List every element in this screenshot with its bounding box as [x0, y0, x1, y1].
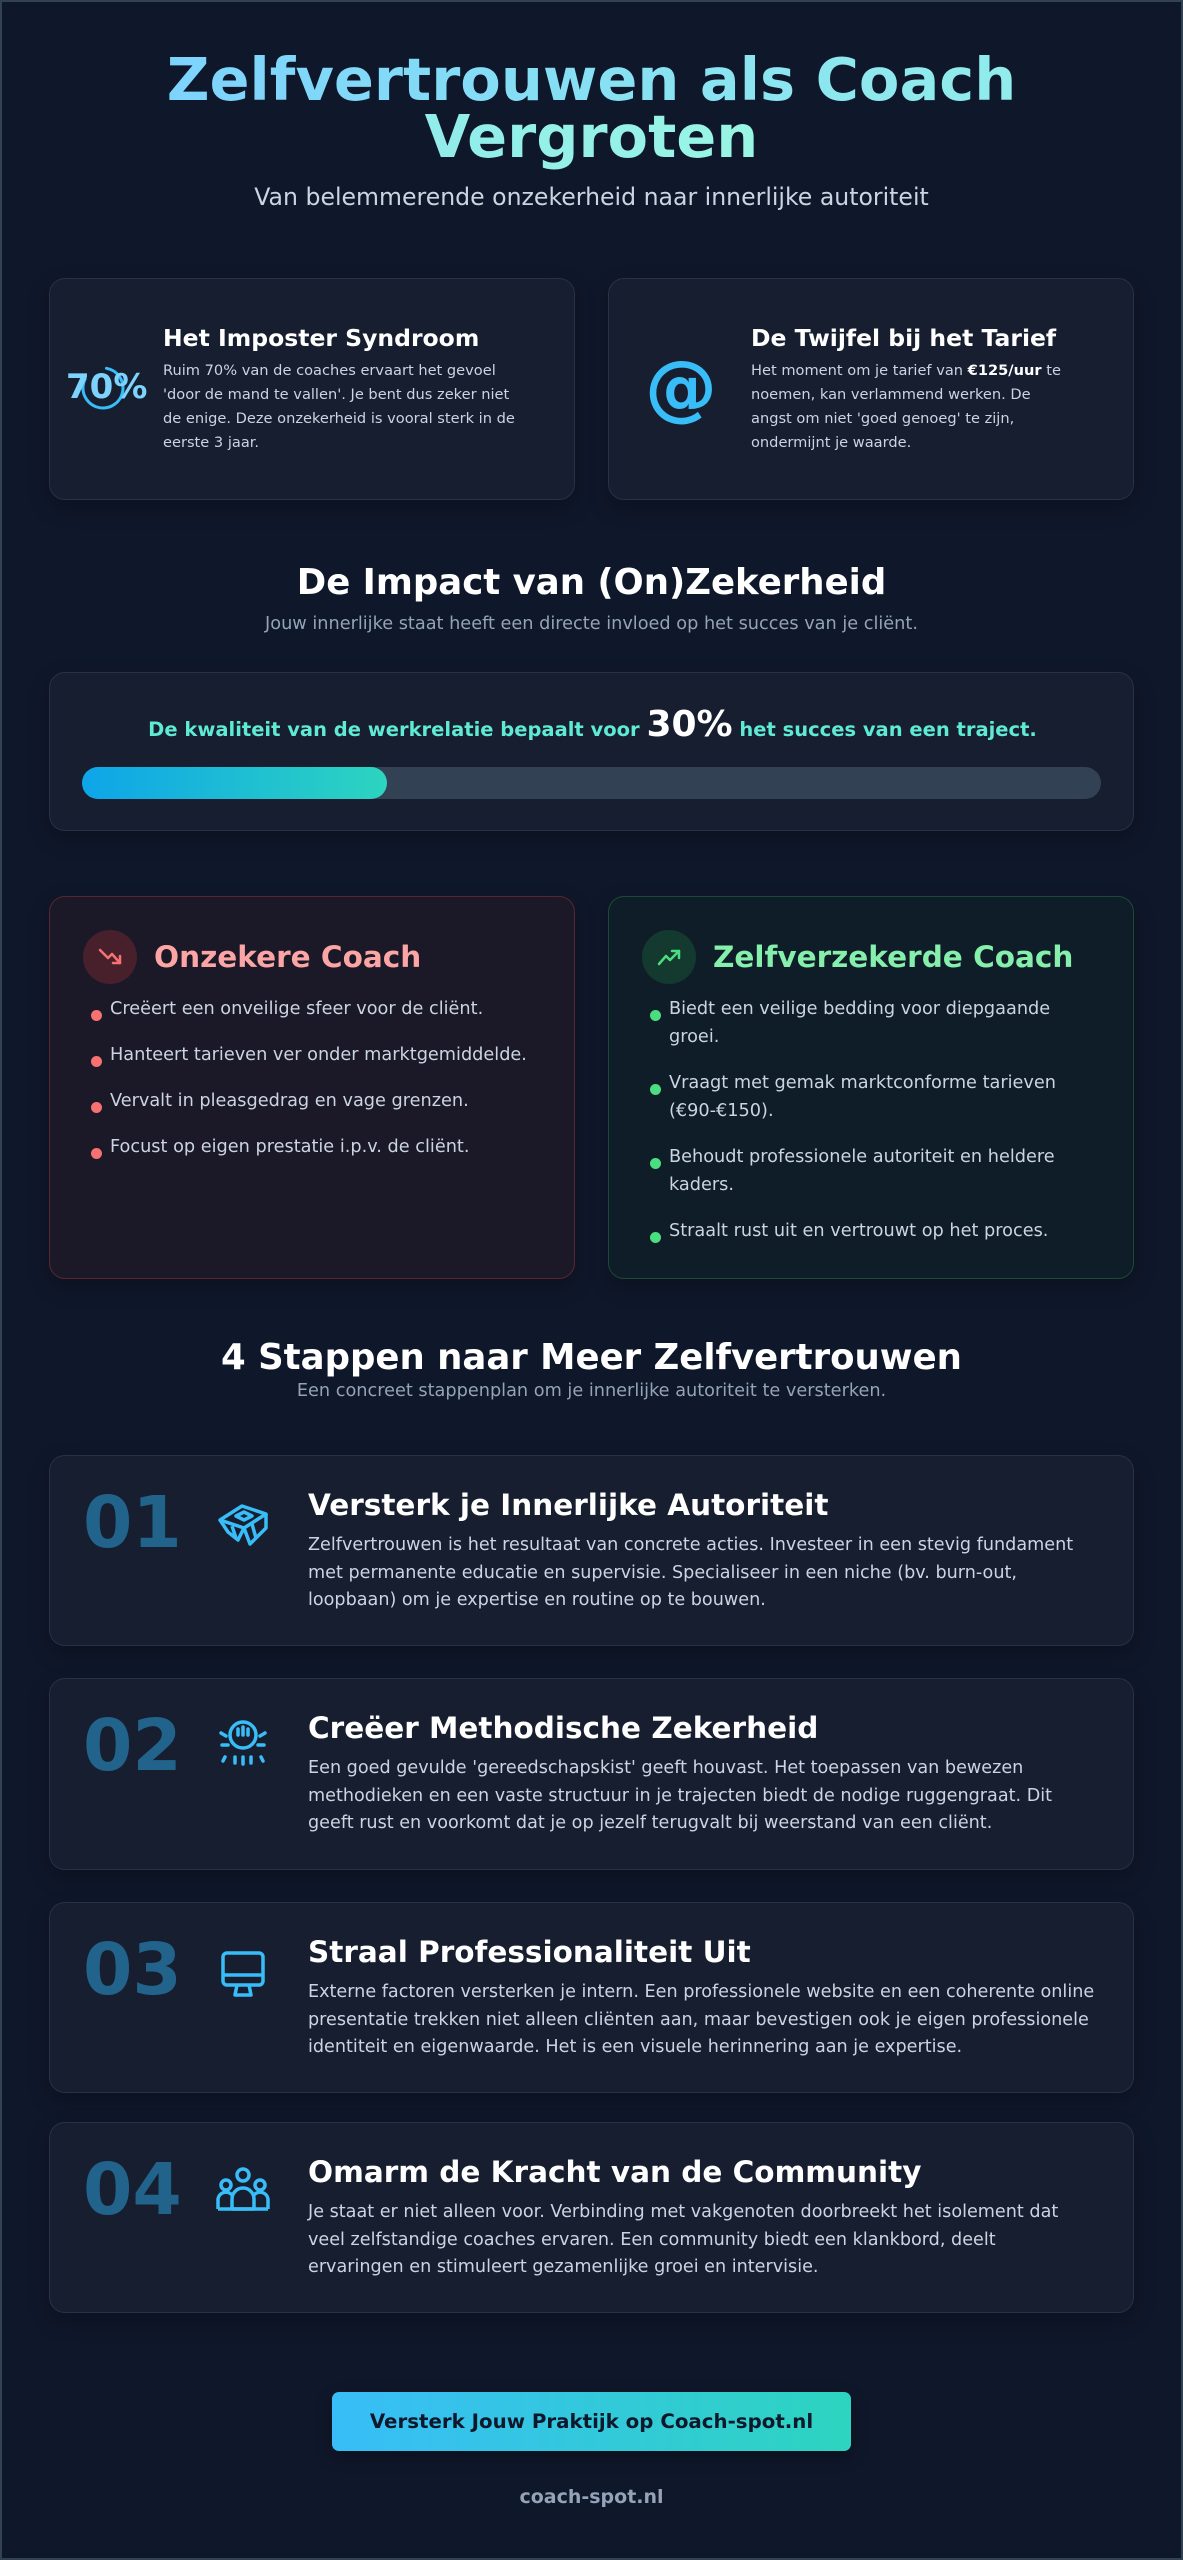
text: angst om niet 'goed genoeg' te zijn,	[751, 410, 1014, 427]
panel: stat 30%	[49, 672, 1134, 831]
panel: twijfel tarief	[608, 278, 1134, 500]
subtitle: impact: Jouw innerlijke staat heeft een directe invloed op het succes van je cliënt.	[265, 614, 918, 634]
cta button	[332, 2392, 851, 2451]
text: identiteit en eigenwaarde. Het is een visuele herinnering aan je expertise.	[308, 2037, 962, 2057]
title: Zelfvertrouwen als Coach	[167, 45, 1016, 114]
text: de enige. Deze onzekerheid is vooral sterk in de	[163, 410, 515, 427]
heading: Creëer Methodische Zekerheid	[308, 1711, 818, 1745]
title	[167, 45, 1016, 171]
number: 02	[83, 1704, 182, 1787]
text	[751, 362, 1061, 451]
list: Focust op eigen prestatie i.p.v. de cliënt.	[110, 1137, 469, 1157]
panel: step 03	[49, 1902, 1134, 2093]
text	[308, 1758, 1052, 1833]
icon: at sign: @	[645, 345, 717, 429]
heading: impact: De Impact van (On)Zekerheid	[297, 562, 886, 603]
list: Vraagt met gemak marktconforme tarieven (€90-€150).	[669, 1073, 1056, 1121]
heading: Straal Professionaliteit Uit	[308, 1935, 751, 1969]
list	[650, 999, 1056, 1243]
icon: cube	[218, 1504, 268, 1546]
icon: 70%: 70%	[66, 367, 147, 407]
text: methodieken en een vaste structuur in je trajecten biedt de nodige ruggengraat. Dit	[308, 1786, 1052, 1806]
number: 03	[83, 1928, 182, 2011]
subtitle: Van belemmerende onzekerheid naar innerlijke autoriteit	[254, 183, 929, 211]
icon: trend down	[83, 930, 137, 984]
text: geeft rust en voorkomt dat je op jezelf terugvalt bij weerstand van een cliënt.	[308, 1813, 992, 1833]
text	[307, 2202, 1058, 2277]
text: Ruim 70% van de coaches ervaart het gevoel	[163, 362, 496, 379]
list: Vervalt in pleasgedrag en vage grenzen.	[110, 1091, 469, 1111]
text: noemen, kan verlammend werken. De	[751, 386, 1031, 403]
list: Behoudt professionele autoriteit en heldere kaders.	[669, 1147, 1055, 1195]
text: presentatie trekken niet alleen cliënten aan, maar bevestigen ook je eigen professionele	[308, 2010, 1089, 2030]
text: eerste 3 jaar.	[163, 434, 259, 451]
text: 'door de mand te vallen'. Je bent dus zeker niet	[163, 386, 509, 403]
icon: trend up	[642, 930, 696, 984]
cta button: Versterk Jouw Praktijk op Coach-spot.nl	[370, 2410, 813, 2433]
text	[308, 1982, 1094, 2057]
panel: step 04	[49, 2122, 1134, 2313]
list: Biedt een veilige bedding voor diepgaande groei.	[669, 999, 1050, 1047]
icon: monitor	[221, 1951, 265, 1997]
text	[163, 362, 515, 451]
panel: zelfverzekerde coach	[608, 896, 1134, 1279]
title: Vergroten	[425, 102, 758, 171]
heading: Omarm de Kracht van de Community	[308, 2155, 922, 2189]
icon: lightbulb	[219, 1720, 267, 1766]
panel: step 01	[49, 1455, 1134, 1646]
stat text: De kwaliteit van de werkrelatie bepaalt voor 30% het succes van een traject.	[148, 704, 1037, 745]
heading: Het Imposter Syndroom	[163, 324, 479, 352]
list: Creëert een onveilige sfeer voor de cliënt.	[110, 999, 483, 1019]
heading: De Twijfel bij het Tarief	[751, 324, 1056, 352]
text: ervaringen en stimuleert gezamenlijke groei en intervisie.	[308, 2257, 819, 2277]
text: Het moment om je tarief van €125/uur te	[751, 362, 1061, 379]
list: Hanteert tarieven ver onder marktgemiddelde.	[110, 1045, 527, 1065]
number: 01	[83, 1481, 182, 1564]
panel: step 02	[49, 1678, 1134, 1870]
heading: Versterk je Innerlijke Autoriteit	[308, 1488, 828, 1522]
text: Externe factoren versterken je intern. Een professionele website en een coherente online	[308, 1982, 1094, 2002]
panel: onzekere coach	[49, 896, 575, 1279]
text: veel zelfstandige coaches ervaren. Een community biedt een klankbord, deelt	[308, 2230, 996, 2250]
heading: Zelfverzekerde Coach	[713, 940, 1073, 974]
heading: 4 stappen: 4 Stappen naar Meer Zelfvertrouwen	[221, 1337, 962, 1378]
text: loopbaan) om je expertise en routine op te bouwen.	[308, 1590, 766, 1610]
text: Een goed gevulde 'gereedschapskist' geeft houvast. Het toepassen van bewezen	[308, 1758, 1023, 1778]
list: Straalt rust uit en vertrouwt op het proces.	[669, 1221, 1048, 1241]
text: ondermijnt je waarde.	[751, 434, 911, 451]
footer: coach-spot.nl	[519, 2486, 664, 2508]
text: Zelfvertrouwen is het resultaat van concrete acties. Investeer in een stevig fundament	[308, 1535, 1073, 1555]
icon: users	[216, 2167, 270, 2211]
number: 04	[83, 2148, 182, 2231]
panel: imposter syndroom	[49, 278, 575, 500]
progress bar	[82, 767, 1101, 799]
text	[308, 1535, 1073, 1610]
heading: Onzekere Coach	[154, 940, 421, 974]
text: met permanente educatie en supervisie. Specialiseer in een niche (bv. burn-out,	[308, 1562, 1017, 1582]
list	[91, 999, 527, 1159]
text: Je staat er niet alleen voor. Verbinding met vakgenoten doorbreekt het isolement dat	[308, 2202, 1058, 2222]
subtitle: stappen: Een concreet stappenplan om je innerlijke autoriteit te versterken.	[297, 1381, 886, 1401]
